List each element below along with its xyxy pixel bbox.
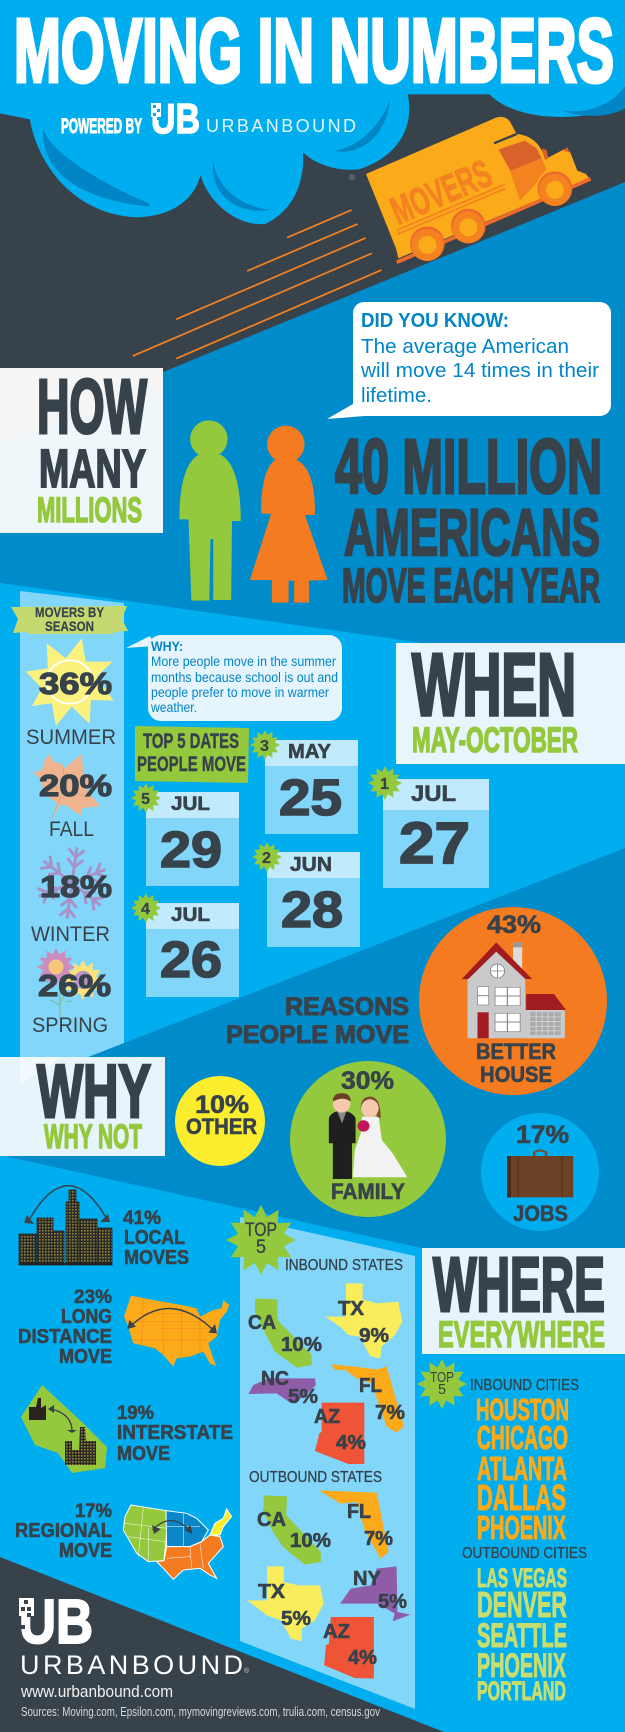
outbound: new york: NY: [353, 1568, 382, 1590]
date card: jul 26: 4: [141, 901, 150, 918]
date card: jul 27: 27: [399, 811, 470, 876]
list: outbound cities: PORTLAND: [477, 1676, 566, 1706]
stat: spring: [32, 968, 111, 1037]
ribbon: SEASON: [45, 618, 94, 634]
outbound: new york: 5%: [378, 1591, 407, 1613]
footer sources: Sources: Moving.com, Epsilon.com, mymovingreviews.com, trulia.com, census.gov: [21, 1705, 381, 1719]
badge: top 5 cities: 5: [438, 1381, 446, 1398]
move type: interstate: [21, 1385, 233, 1473]
heading: reasons people move: [226, 993, 409, 1049]
callout: why: months because school is out and: [151, 669, 338, 685]
move type: local: 41%: [123, 1208, 161, 1229]
date card: may 25: MAY: [288, 741, 332, 763]
list: inbound cities: ATLANTA: [477, 1450, 567, 1487]
powered by: POWERED BY: [61, 115, 142, 138]
truck: MOVERS: [385, 152, 498, 233]
inbound: florida: [331, 1364, 405, 1433]
background: dark blue band middle: [0, 848, 625, 1293]
callout: why: weather.: [150, 699, 197, 715]
stat: winter: [31, 869, 112, 946]
reason: family: FAMILY: [331, 1179, 405, 1204]
move type: long distance: DISTANCE: [18, 1326, 112, 1348]
label: top 5 dates: [135, 726, 249, 783]
powered by: URBANBOUND: [206, 116, 356, 136]
reason: jobs: JOBS: [513, 1201, 568, 1226]
panel: why: WHY NOT: [44, 1118, 142, 1156]
stat: spring: 26%: [38, 968, 111, 1003]
date card: jun 28: JUN: [290, 854, 332, 876]
footer logo: ®: [244, 1667, 250, 1675]
panel: how many millions: HOW: [37, 364, 147, 450]
inbound: california: CA: [248, 1312, 276, 1334]
panel: movers by season: [11, 591, 128, 1085]
outbound: florida: 7%: [364, 1528, 393, 1550]
date card: jul 26: JUL: [171, 905, 210, 926]
icon: suitcase: [507, 1150, 573, 1197]
list: outbound cities: OUTBOUND CITIES: [462, 1545, 587, 1562]
callout: why: people prefer to move in warmer: [151, 684, 329, 700]
label: top 5 dates: TOP 5 DATES: [143, 730, 239, 753]
reason: jobs: 17%: [516, 1121, 569, 1149]
inbound: california: [248, 1298, 322, 1368]
footer logo: [19, 1588, 250, 1680]
ribbon: MOVERS BY: [35, 604, 105, 620]
date card: jun 28: 2: [262, 850, 271, 867]
outbound: texas: [247, 1566, 324, 1641]
badge: top 5 cities: TOP: [430, 1369, 454, 1386]
move type: long distance: LONG: [61, 1306, 112, 1328]
powered by: [61, 95, 356, 142]
stat: summer: [26, 666, 116, 749]
truck: ®: [349, 173, 355, 182]
speed lines: [133, 210, 381, 359]
move type: interstate: 19%: [117, 1403, 154, 1424]
outbound: california: [257, 1495, 331, 1565]
stat: spring: SPRING: [32, 1014, 108, 1037]
inbound: california: 10%: [281, 1334, 322, 1356]
list: outbound cities: SEATTLE: [477, 1617, 567, 1655]
heading: reasons people move: REASONS: [285, 993, 409, 1021]
stat: summer: 36%: [39, 666, 112, 701]
badge: top 5 cities: [417, 1359, 467, 1409]
footer logo: UB: [19, 1588, 93, 1657]
reason: jobs: [481, 1113, 599, 1231]
date card: jul 26: 26: [160, 931, 222, 988]
move type: interstate: INTERSTATE: [117, 1422, 233, 1444]
stat: fall: FALL: [49, 818, 94, 841]
date card: jul 29: 5: [141, 791, 150, 808]
date card: jul 29: 29: [160, 821, 222, 878]
list: outbound cities: DENVER: [477, 1584, 567, 1625]
move type: regional: MOVE: [59, 1540, 112, 1562]
reason: better house: HOUSE: [480, 1062, 552, 1087]
badge: top 5: TOP: [245, 1220, 277, 1241]
inbound: florida: 7%: [375, 1402, 405, 1424]
inbound: arizona: 4%: [336, 1432, 366, 1454]
icon: leaf: [33, 753, 100, 819]
callout: did you know: lifetime.: [361, 385, 432, 407]
date card: jul 29: JUL: [171, 794, 210, 815]
truck: [349, 117, 591, 262]
icon: skyline: [19, 1186, 112, 1265]
outbound: arizona: [323, 1617, 377, 1679]
panel: top 5 states: [226, 1205, 415, 1709]
badge: top 5: [226, 1205, 296, 1275]
stat: fall: 20%: [39, 768, 112, 803]
background: dark slate footer: [0, 1557, 444, 1732]
callout: did you know: DID YOU KNOW:: [361, 310, 509, 332]
inbound: arizona: [314, 1403, 366, 1464]
callout: why: More people move in the summer: [151, 653, 336, 669]
icon: bride and groom: [329, 1093, 407, 1179]
outbound: california: 10%: [290, 1530, 331, 1552]
stat: fall: [39, 768, 112, 841]
date card: jun 28: [252, 842, 360, 947]
date card: may 25: [250, 730, 358, 834]
date card: jul 26: [131, 893, 239, 997]
reason: other: [175, 1076, 265, 1166]
date card: may 25: 25: [279, 769, 342, 826]
outbound: arizona: 4%: [348, 1647, 377, 1669]
panel: how many millions: MANY: [39, 439, 146, 499]
move type: regional: REGIONAL: [15, 1520, 112, 1542]
move type: long distance: [18, 1287, 229, 1368]
list: outbound cities: [462, 1545, 587, 1706]
icon: state with buildings: [21, 1385, 107, 1473]
date card: jul 29: [131, 783, 239, 886]
move type: interstate: MOVE: [117, 1443, 170, 1465]
powered by: UB: [151, 95, 200, 142]
move type: long distance: MOVE: [59, 1346, 112, 1368]
stat: winter: WINTER: [31, 923, 110, 946]
callout: did you know: will move 14 times in their: [360, 360, 599, 382]
reason: family: 30%: [341, 1067, 394, 1095]
reason: better house: BETTER: [476, 1039, 556, 1064]
date card: jul 27: [368, 766, 489, 888]
icon: usa map orange: [124, 1296, 229, 1367]
icon: house: [462, 942, 566, 1038]
list: inbound cities: INBOUND CITIES: [470, 1377, 579, 1394]
icon: flowers: [37, 948, 103, 1018]
icon: usa regions map: [123, 1505, 232, 1579]
cloud: [0, 0, 625, 224]
reason: other: OTHER: [186, 1114, 257, 1139]
date card: jul 27: JUL: [411, 781, 456, 806]
stat: summer: SUMMER: [26, 726, 116, 749]
outbound: florida: [319, 1490, 393, 1559]
list: inbound cities: [470, 1377, 579, 1546]
stat: winter: 18%: [40, 869, 112, 904]
callout: did you know: [327, 302, 611, 419]
move type: regional: [15, 1501, 232, 1579]
date card: jun 28: 28: [281, 881, 343, 938]
date card: may 25: 3: [260, 738, 269, 755]
headline: 40 million americans: [335, 424, 602, 613]
date card: jul 27: 1: [380, 776, 389, 793]
move type: local: MOVES: [124, 1247, 189, 1269]
panel: why: WHY: [37, 1049, 151, 1133]
inbound: texas: [325, 1283, 402, 1358]
inbound: north carolina: NC: [261, 1368, 289, 1390]
move type: regional: 17%: [75, 1501, 112, 1522]
inbound: texas: 9%: [359, 1325, 389, 1347]
icon: man and woman: [179, 420, 328, 603]
panel: why: [0, 1049, 165, 1156]
panel: how many millions: MILLIONS: [37, 491, 142, 530]
heading: reasons people move: PEOPLE MOVE: [226, 1021, 409, 1049]
badge: top 5: 5: [256, 1237, 266, 1258]
footer url: www.urbanbound.com: [20, 1682, 173, 1701]
heading: inbound states: INBOUND STATES: [285, 1257, 403, 1274]
outbound: new york: [340, 1566, 411, 1621]
inbound: north carolina: [248, 1368, 318, 1408]
heading: outbound states: OUTBOUND STATES: [249, 1469, 382, 1486]
callout: why: WHY:: [151, 638, 183, 654]
list: inbound cities: DALLAS: [477, 1477, 566, 1518]
callout: did you know: The average American: [361, 336, 569, 358]
icon: snowflake: [32, 842, 112, 924]
reason: family: [290, 1061, 446, 1217]
inbound: north carolina: 5%: [288, 1386, 318, 1408]
footer logo: URBANBOUND: [20, 1650, 243, 1680]
move type: local: [19, 1186, 189, 1269]
background: dark blue band upper: [0, 182, 625, 672]
inbound: texas: TX: [338, 1298, 365, 1320]
list: inbound cities: PHOENIX: [477, 1509, 566, 1546]
reason: better house: 43%: [487, 911, 541, 939]
outbound: california: CA: [257, 1509, 286, 1531]
move type: local: LOCAL: [124, 1227, 185, 1249]
icon: sun: [26, 638, 114, 726]
callout: why: [126, 635, 342, 721]
inbound: arizona: AZ: [314, 1406, 340, 1428]
reason: other: 10%: [195, 1091, 249, 1119]
label: top 5 dates: PEOPLE MOVE: [137, 753, 246, 776]
outbound: texas: TX: [258, 1581, 286, 1603]
background: dark slate header: [0, 0, 625, 440]
reason: better house: [419, 907, 607, 1095]
outbound: texas: 5%: [281, 1608, 311, 1630]
inbound: florida: FL: [359, 1375, 382, 1397]
ribbon: [11, 604, 128, 634]
move type: long distance: 23%: [74, 1287, 112, 1308]
outbound: florida: FL: [347, 1501, 371, 1523]
outbound: arizona: AZ: [323, 1621, 350, 1643]
panel: how many millions: [0, 364, 163, 533]
